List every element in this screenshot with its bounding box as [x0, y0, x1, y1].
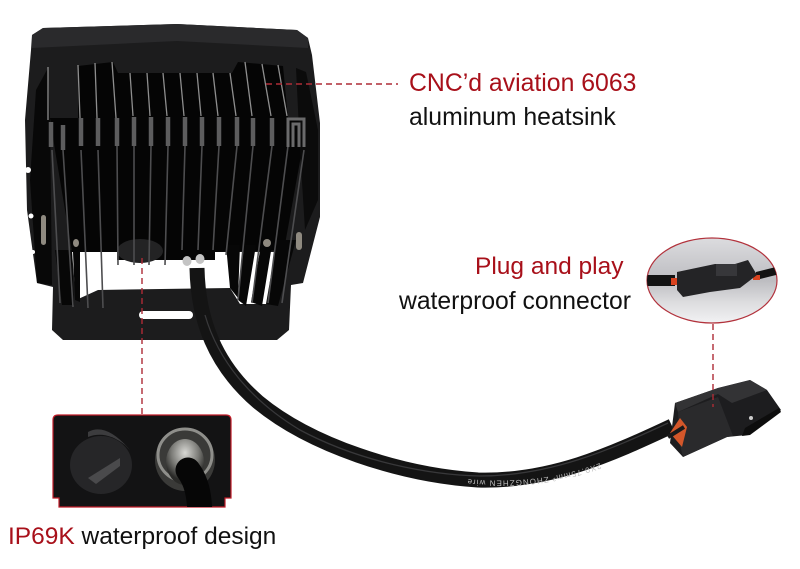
lamp housing with heatsink — [25, 24, 320, 340]
connector — [668, 380, 781, 457]
heatsink core — [30, 68, 52, 285]
heading: Plug and play: Plug and play — [475, 253, 624, 280]
inset background — [53, 415, 231, 507]
cable close-up — [188, 470, 200, 512]
inset: waterproof details — [53, 415, 231, 512]
cable — [197, 268, 672, 480]
right fins over opening — [226, 240, 296, 306]
cable gland — [182, 254, 204, 266]
heading: CNC'd aviation 6063: CNC’d aviation 6063 — [409, 70, 636, 97]
dashed leader: heatsink — [266, 83, 398, 85]
dashed leader: waterproof design — [141, 258, 143, 414]
orange seal — [670, 418, 687, 447]
left fins over opening — [55, 250, 80, 305]
callout: plug and play — [398, 253, 631, 315]
metal gland — [155, 429, 215, 491]
rubber vent plug — [117, 239, 163, 263]
text: aluminum heatsink: aluminum heatsink — [409, 104, 616, 131]
heatsink fin edges — [48, 62, 304, 308]
connector detail bubble — [645, 238, 780, 323]
bracket opening — [72, 252, 278, 304]
top cap — [32, 24, 308, 48]
vent plug close-up — [70, 436, 132, 494]
connector close-up — [645, 260, 780, 297]
connector clip — [742, 408, 781, 436]
connector top face — [675, 380, 767, 412]
connector front — [678, 397, 733, 457]
side notches — [25, 167, 35, 254]
connector wire — [668, 427, 684, 437]
dashed leader: connector — [712, 324, 714, 407]
caption: IP69K waterproof design: IP69K waterproof design — [8, 523, 276, 550]
housing body — [25, 24, 320, 340]
bubble background — [647, 238, 777, 323]
mounting slot — [139, 311, 193, 319]
text: waterproof connector: waterproof connector — [398, 288, 631, 315]
cable print: 2X0.75mm² ZHONGZHEN wire — [468, 463, 601, 486]
side screws — [41, 215, 302, 250]
callout: heatsink — [409, 70, 636, 131]
connector body — [670, 380, 781, 457]
